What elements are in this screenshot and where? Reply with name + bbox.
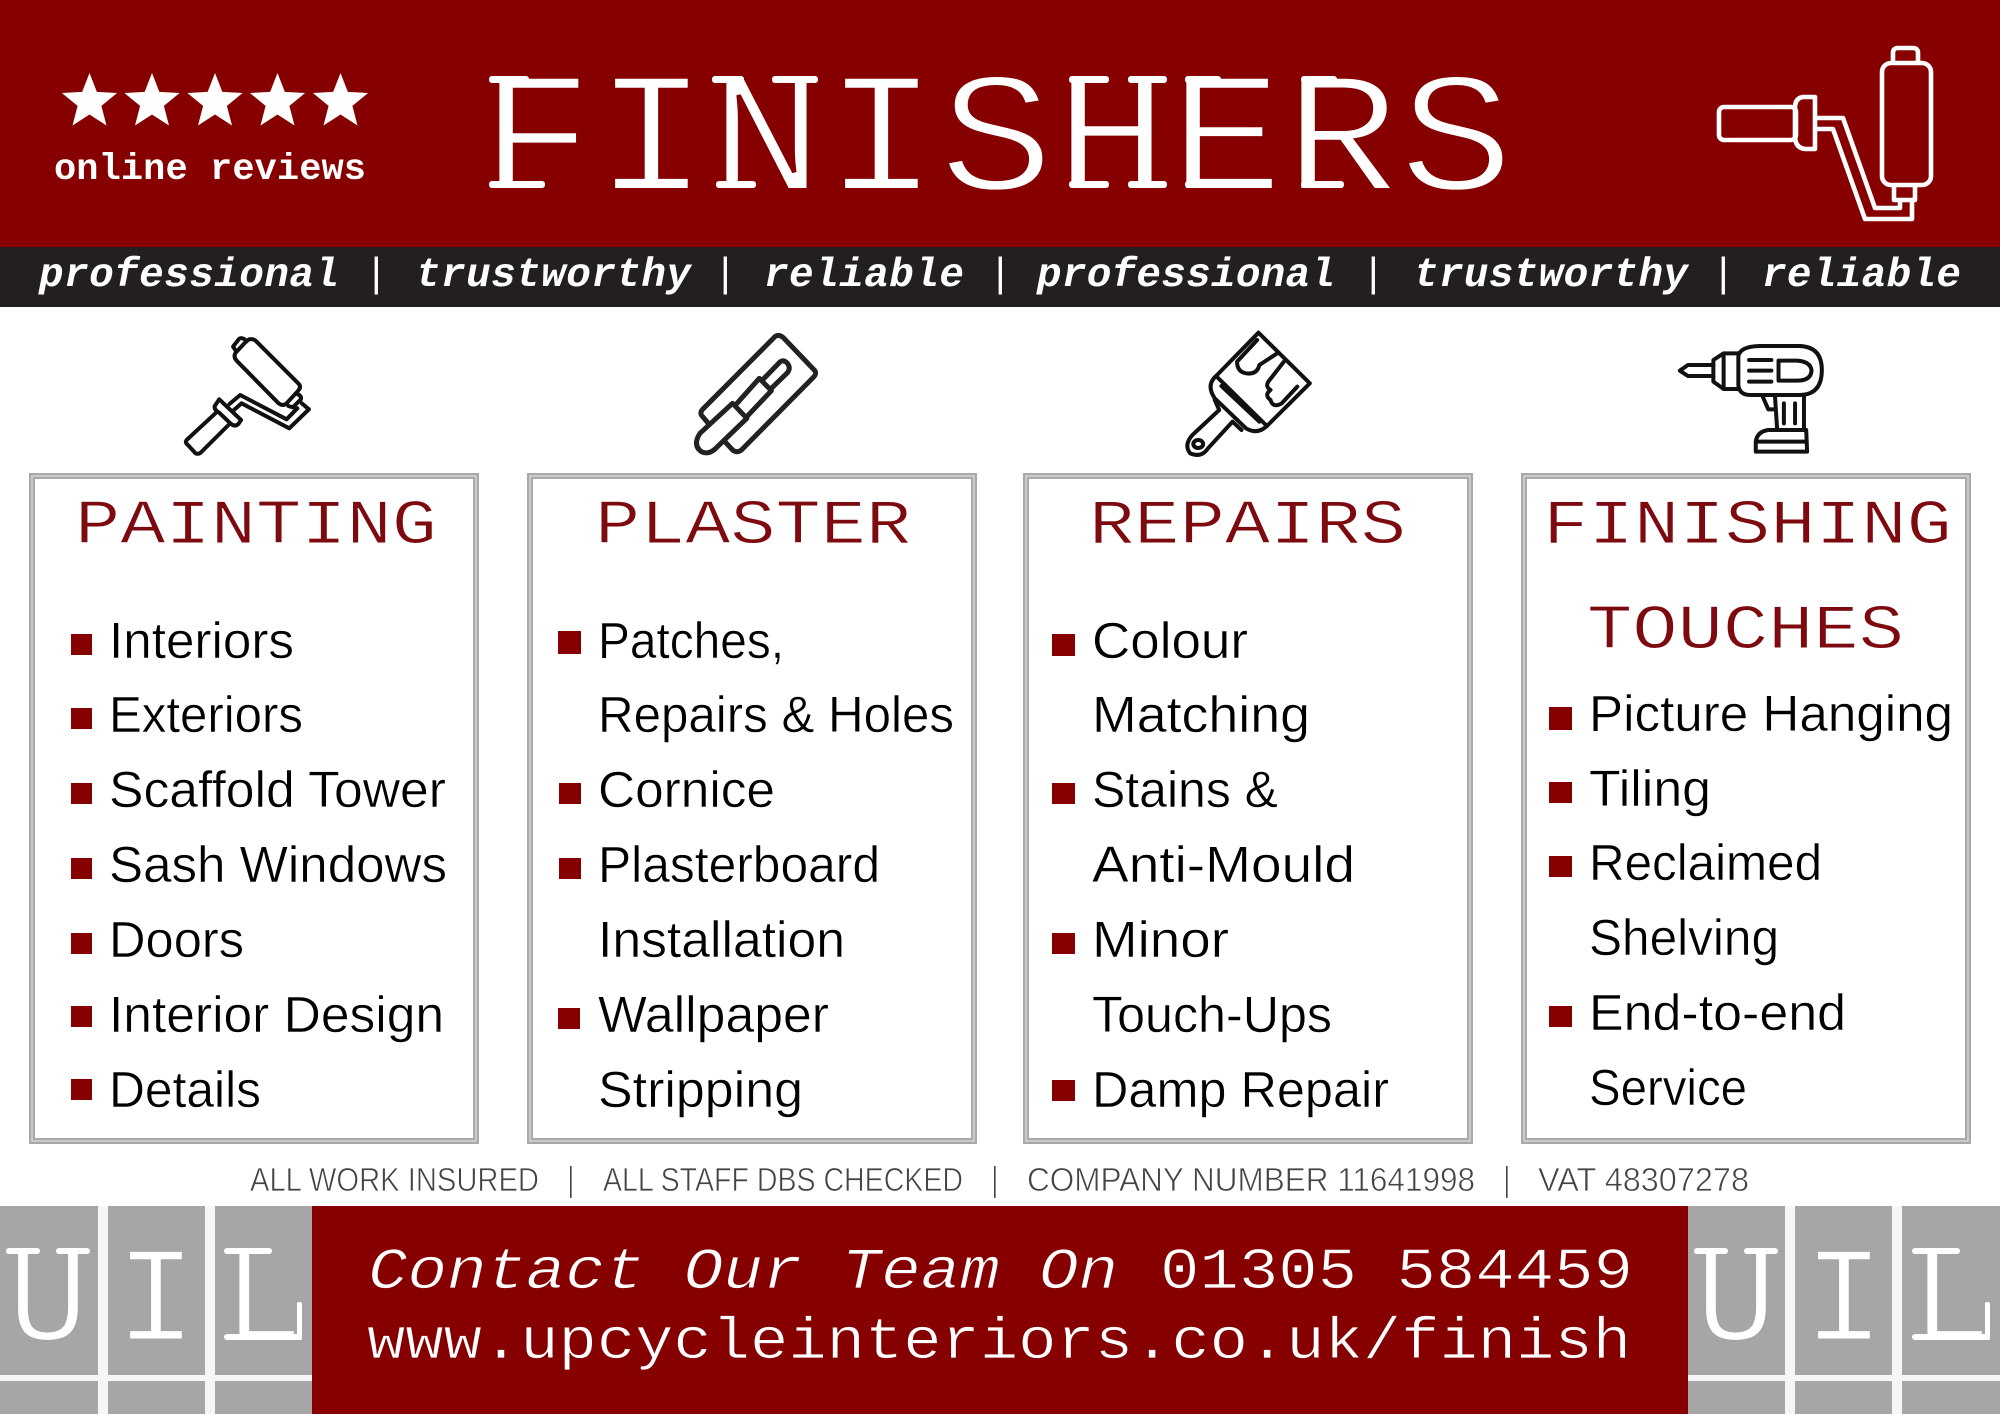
- contact details: [367, 1241, 1633, 1376]
- list: painting: Scaffold Tower: [109, 761, 446, 818]
- list: painting: Interior Design: [109, 986, 444, 1043]
- icon: white paint roller: [1719, 48, 1931, 219]
- list: finishing touches: Shelving: [1589, 909, 1779, 966]
- list: finishing touches: Reclaimed: [1589, 834, 1822, 891]
- list: repairs: Stains &: [1092, 761, 1278, 818]
- list: plaster: Installation: [598, 911, 845, 968]
- panel: plaster: [530, 476, 974, 1141]
- credentials line: [250, 1161, 1749, 1198]
- contact details: Contact Our Team On: [368, 1241, 1118, 1306]
- icon: paint roller: [186, 338, 309, 454]
- list: painting: Interiors: [109, 612, 294, 669]
- list: repairs: [1052, 612, 1389, 1118]
- heading: finishing touches: FINISHING: [1543, 491, 1952, 562]
- list: plaster: Plasterboard: [598, 836, 880, 893]
- credentials line: ALL WORK INSURED: [250, 1161, 539, 1198]
- list: plaster: Repairs & Holes: [598, 686, 954, 743]
- list: plaster: Wallpaper: [598, 986, 829, 1043]
- icon: cordless drill: [1680, 346, 1822, 452]
- list: painting: Sash Windows: [109, 836, 447, 893]
- icon: paint brush: [1187, 333, 1310, 455]
- list: finishing touches: Picture Hanging: [1589, 685, 1953, 742]
- list: painting: [71, 612, 447, 1118]
- list: repairs: Damp Repair: [1092, 1061, 1389, 1118]
- tagline text: |: [1361, 253, 1386, 299]
- star rating: [62, 73, 368, 126]
- tagline text: |: [713, 253, 738, 299]
- list: finishing touches: End-to-end: [1589, 984, 1846, 1041]
- list: repairs: Touch-Ups: [1092, 986, 1332, 1043]
- tagline text: trustworthy: [416, 253, 692, 299]
- logo tile: right: L: [1910, 1227, 1992, 1381]
- heading: plaster: PLASTER: [595, 491, 911, 562]
- list: painting: Details: [109, 1061, 261, 1118]
- title: FINISHERS: [479, 47, 1514, 242]
- list: finishing touches: Service: [1589, 1059, 1747, 1116]
- list: painting: Doors: [109, 911, 244, 968]
- list: plaster: Patches,: [598, 612, 784, 669]
- tagline text: [38, 253, 1961, 299]
- tagline text: reliable: [764, 253, 964, 299]
- list: plaster: Stripping: [598, 1061, 803, 1118]
- logo tile: left: U: [7, 1227, 89, 1381]
- contact details: 01305 584459: [1160, 1241, 1633, 1306]
- tagline text: |: [364, 253, 389, 299]
- logo tile: right: I: [1803, 1227, 1885, 1381]
- heading: repairs: REPAIRS: [1089, 491, 1406, 562]
- tagline text: trustworthy: [1414, 253, 1689, 299]
- header band: [0, 0, 2000, 247]
- contact details: www.upcycleinteriors.co.uk/finish: [367, 1311, 1631, 1376]
- list: plaster: [558, 612, 954, 1118]
- logo tile: left: I: [115, 1227, 197, 1381]
- logo tile: left: [0, 1206, 312, 1414]
- logo tile: left: L: [222, 1227, 304, 1381]
- panel: finishing touches: [1524, 476, 1968, 1141]
- logo tile: right: U: [1695, 1227, 1777, 1381]
- tagline text: professional: [1036, 253, 1335, 299]
- online reviews caption: online reviews: [54, 149, 366, 191]
- list: repairs: Colour: [1092, 612, 1248, 669]
- list: finishing touches: Tiling: [1589, 760, 1711, 817]
- credentials line: COMPANY NUMBER 11641998: [1027, 1161, 1475, 1198]
- heading: painting: PAINTING: [75, 491, 437, 562]
- panel: repairs: [1026, 476, 1470, 1141]
- list: painting: Exteriors: [109, 686, 303, 743]
- list: repairs: Anti-Mould: [1092, 836, 1355, 893]
- heading: finishing touches: TOUCHES: [1587, 596, 1904, 667]
- list: finishing touches: [1549, 685, 1953, 1116]
- tagline band: [0, 247, 2000, 307]
- list: plaster: Cornice: [598, 761, 775, 818]
- list: repairs: Matching: [1092, 686, 1310, 743]
- tagline text: professional: [38, 253, 339, 299]
- list: repairs: Minor: [1092, 911, 1229, 968]
- credentials line: VAT 48307278: [1538, 1161, 1749, 1198]
- tagline text: |: [988, 253, 1013, 299]
- tagline text: |: [1711, 253, 1736, 299]
- icon: plastering trowel: [696, 335, 816, 453]
- heading: finishing touches: [1543, 491, 1952, 667]
- panel: painting: [32, 476, 476, 1141]
- logo tile: right: [1688, 1206, 2000, 1414]
- tagline text: reliable: [1762, 253, 1961, 299]
- contact band: [312, 1206, 1688, 1414]
- credentials line: ALL STAFF DBS CHECKED: [603, 1161, 963, 1198]
